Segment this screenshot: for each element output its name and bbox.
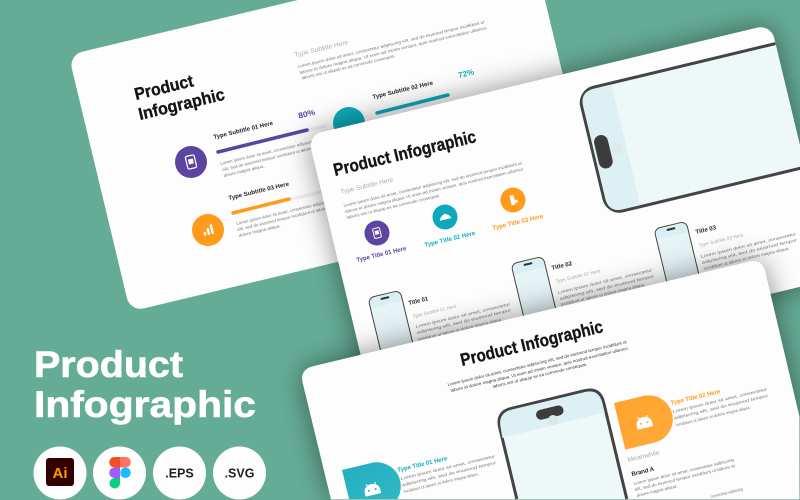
text block: title 01 xyxy=(400,453,497,494)
text block: item 01 xyxy=(220,138,319,178)
badge: teal android xyxy=(342,462,401,499)
text block: title 01: incididunt ut labore et dolore magna aliqua. xyxy=(417,317,503,342)
panel: front slide with large phone xyxy=(302,261,800,500)
text block: item 03 xyxy=(236,198,334,238)
badge: svg: .SVG xyxy=(225,466,254,480)
label: type title 02: Type Title 02 Here xyxy=(424,230,477,249)
text block: title 03: incididunt ut labore et dolore magna aliqua. xyxy=(703,246,790,271)
title 02: Title 02 xyxy=(551,261,574,272)
value: 72 percent: 72% xyxy=(457,67,475,80)
text block: title 01: incididunt ut labore et dolore magna aliqua. xyxy=(403,471,479,494)
heading: slide 1 title: Infographic xyxy=(136,85,227,124)
text block: brand a: elit, sed do eiusmod tempor incididunt ut labore et xyxy=(634,463,736,492)
text block: slide 2 intro: Lorem ipsum dolor sit amet, consectetur adipiscing elit, sed do eiusmod tempor incididunt ut xyxy=(343,160,523,208)
text block: slide 3 intro: Lorem ipsum dolor sit amet, consectetur adipiscing elit, sed do eiusmod tempor incididunt ut xyxy=(447,339,628,387)
label: type title 01: Type Title 01 Here xyxy=(356,245,408,264)
text block: slide 1 intro: laboris nisi ut aliquip ex ea commodo consequat. xyxy=(301,53,396,80)
icon: purple phone xyxy=(175,146,207,178)
icon: adobe illustrator xyxy=(34,446,86,500)
title 03: Title 03 xyxy=(695,225,718,236)
text block: slide 1 intro: Lorem ipsum dolor sit amet, consectetur adipiscing elit, sed do eiusmod tempor incididunt ut xyxy=(297,19,486,69)
main title: Infographic xyxy=(34,384,256,425)
text block: brand a: Lorem ipsum dolor sit amet, consectetur adipiscing xyxy=(633,457,735,486)
value: 80 percent: 80% xyxy=(297,108,316,120)
phone 03 xyxy=(654,222,700,282)
bar: 72 percent xyxy=(377,95,448,113)
text block: title 02 xyxy=(672,386,769,427)
heading: slide 2 title: Product Infographic xyxy=(331,126,478,180)
big landscape phone xyxy=(580,42,800,213)
text block: title 01: adipiscing elit, sed do eiusmod tempor xyxy=(416,307,512,335)
icon: teal shape xyxy=(432,204,458,230)
icon: teal circle xyxy=(333,107,365,139)
icon: orange chart xyxy=(192,214,224,246)
text block: slide 1 intro: labore et dolore magna aliqua. Ut enim ad minim veniam, quis nostrud exercitation ullamco xyxy=(299,25,488,75)
icon: figma xyxy=(93,446,146,500)
text block: title 01: Lorem ipsum dolor sit amet, consectetur xyxy=(400,453,496,481)
text block: slide 3 intro: laboris nisi ut aliquip ex ea commodo consequat. xyxy=(492,361,588,389)
slide 2 content xyxy=(331,21,800,405)
text block: item 01: dolore magna aliqua. xyxy=(223,163,265,178)
main title: Product xyxy=(34,344,183,385)
text block: title 02: incididunt ut labore et dolore magna aliqua. xyxy=(560,282,646,307)
badge: orange android xyxy=(614,390,678,450)
text block: title 01: Lorem ipsum dolor sit amet, consectetur xyxy=(415,301,511,329)
heading: slide 1 title: Product xyxy=(132,71,196,104)
subtitle: item 02: Type Subtitle 02 Here xyxy=(372,80,434,101)
subtitle: item 03: Type Subtitle 03 Here xyxy=(228,181,290,202)
subtitle 03: Type Subtitle 03 Here xyxy=(698,232,745,249)
panel: back slide with progress bars xyxy=(69,0,593,312)
slide card 1 xyxy=(69,0,593,312)
subtitle: slide 2: Type Subtitle Here xyxy=(340,176,394,196)
slide card 3 xyxy=(302,261,800,500)
text block: title 02: Lorem ipsum dolor sit amet, consectetur xyxy=(557,267,653,295)
text block: title 02: adipiscing elit, sed do eiusmod tempor xyxy=(673,393,769,420)
text block: brand a: consectetur adipiscing xyxy=(710,486,744,499)
text block: item 03: dolore magna aliqua. xyxy=(238,223,281,238)
badge: eps: .EPS xyxy=(165,466,194,480)
text block: title 02 xyxy=(557,267,655,307)
text block: title 03: Lorem ipsum dolor sit amet, consectetur xyxy=(700,231,797,259)
heading: slide 3 title: Product Infographic xyxy=(458,316,605,370)
text block: slide 2 intro xyxy=(343,160,524,220)
badge: eps xyxy=(153,446,206,500)
text block: item 03: elit, sed do eiusmod tempor incididunt ut labore et xyxy=(237,204,334,232)
phone 01 xyxy=(368,291,413,350)
text block: title 03 xyxy=(700,231,798,271)
subtitle 01: Type Subtitle 01 Here xyxy=(412,304,458,320)
text block: item 03: Lorem ipsum dolor sit amet, consectetur adipiscing xyxy=(236,198,333,226)
panel: middle slide with phones xyxy=(308,21,800,405)
slide card 2 xyxy=(308,24,800,390)
text block: title 02: Lorem ipsum dolor sit amet, consectetur xyxy=(672,386,768,414)
large portrait phone xyxy=(499,390,627,499)
bar: 80 percent xyxy=(218,126,325,152)
text block: title 02: adipiscing elit, sed do eiusmod tempor xyxy=(559,273,655,301)
subtitle: slide 1: Type Subtitle Here xyxy=(294,39,349,59)
text block: slide 2 intro: laboris nisi ut aliquip ex ea commodo consequat. xyxy=(346,193,441,220)
subtitle: item 01: Type Subtitle 01 Here xyxy=(213,121,274,141)
phone 02 xyxy=(512,257,556,316)
title 01: Title 01 xyxy=(408,296,430,307)
text block: item 01: Lorem ipsum dolor sit amet, consectetur adipiscing xyxy=(220,138,317,166)
label: meanwhile: Meanwhile xyxy=(627,449,661,464)
text block: slide 3 intro: labore et dolore magna aliqua. Ut enim ad minim veniam, quis nostrud exercitation ullamco xyxy=(450,345,629,393)
bar: item 03 xyxy=(233,191,325,213)
text block: brand a: dolore magna aliqua. xyxy=(636,483,678,498)
icon: orange shape xyxy=(500,188,526,212)
label: type title 02: Type Title 02 Here xyxy=(670,388,722,407)
icon: adobe illustrator: Ai xyxy=(52,465,68,482)
badge: svg xyxy=(213,446,266,500)
text block: title 02: incididunt ut labore et dolore magna aliqua. xyxy=(675,405,751,427)
text block: title 01: adipiscing elit, sed do eiusmod tempor xyxy=(401,460,497,487)
text block: title 03: adipiscing elit, sed do eiusmod tempor xyxy=(701,237,798,265)
text block: brand a xyxy=(633,457,744,499)
subtitle 02: Type Subtitle 02 Here xyxy=(555,268,602,285)
label: brand a: Brand A xyxy=(631,467,655,478)
text block: slide 1 intro xyxy=(297,19,488,80)
main title xyxy=(34,344,256,425)
text block: slide 2 intro: labore et dolore magna aliqua. Ut enim ad minim veniam, quis nostrud exercitation ullamco xyxy=(345,166,524,214)
label: type title 03: Type Title 03 Here xyxy=(492,213,545,232)
icon: purple phone small xyxy=(364,220,390,246)
label: type title 01: Type Title 01 Here xyxy=(397,455,449,474)
text block: title 01 xyxy=(415,301,512,342)
text block: item 01: elit, sed do eiusmod tempor incididunt ut labore et xyxy=(222,144,319,172)
